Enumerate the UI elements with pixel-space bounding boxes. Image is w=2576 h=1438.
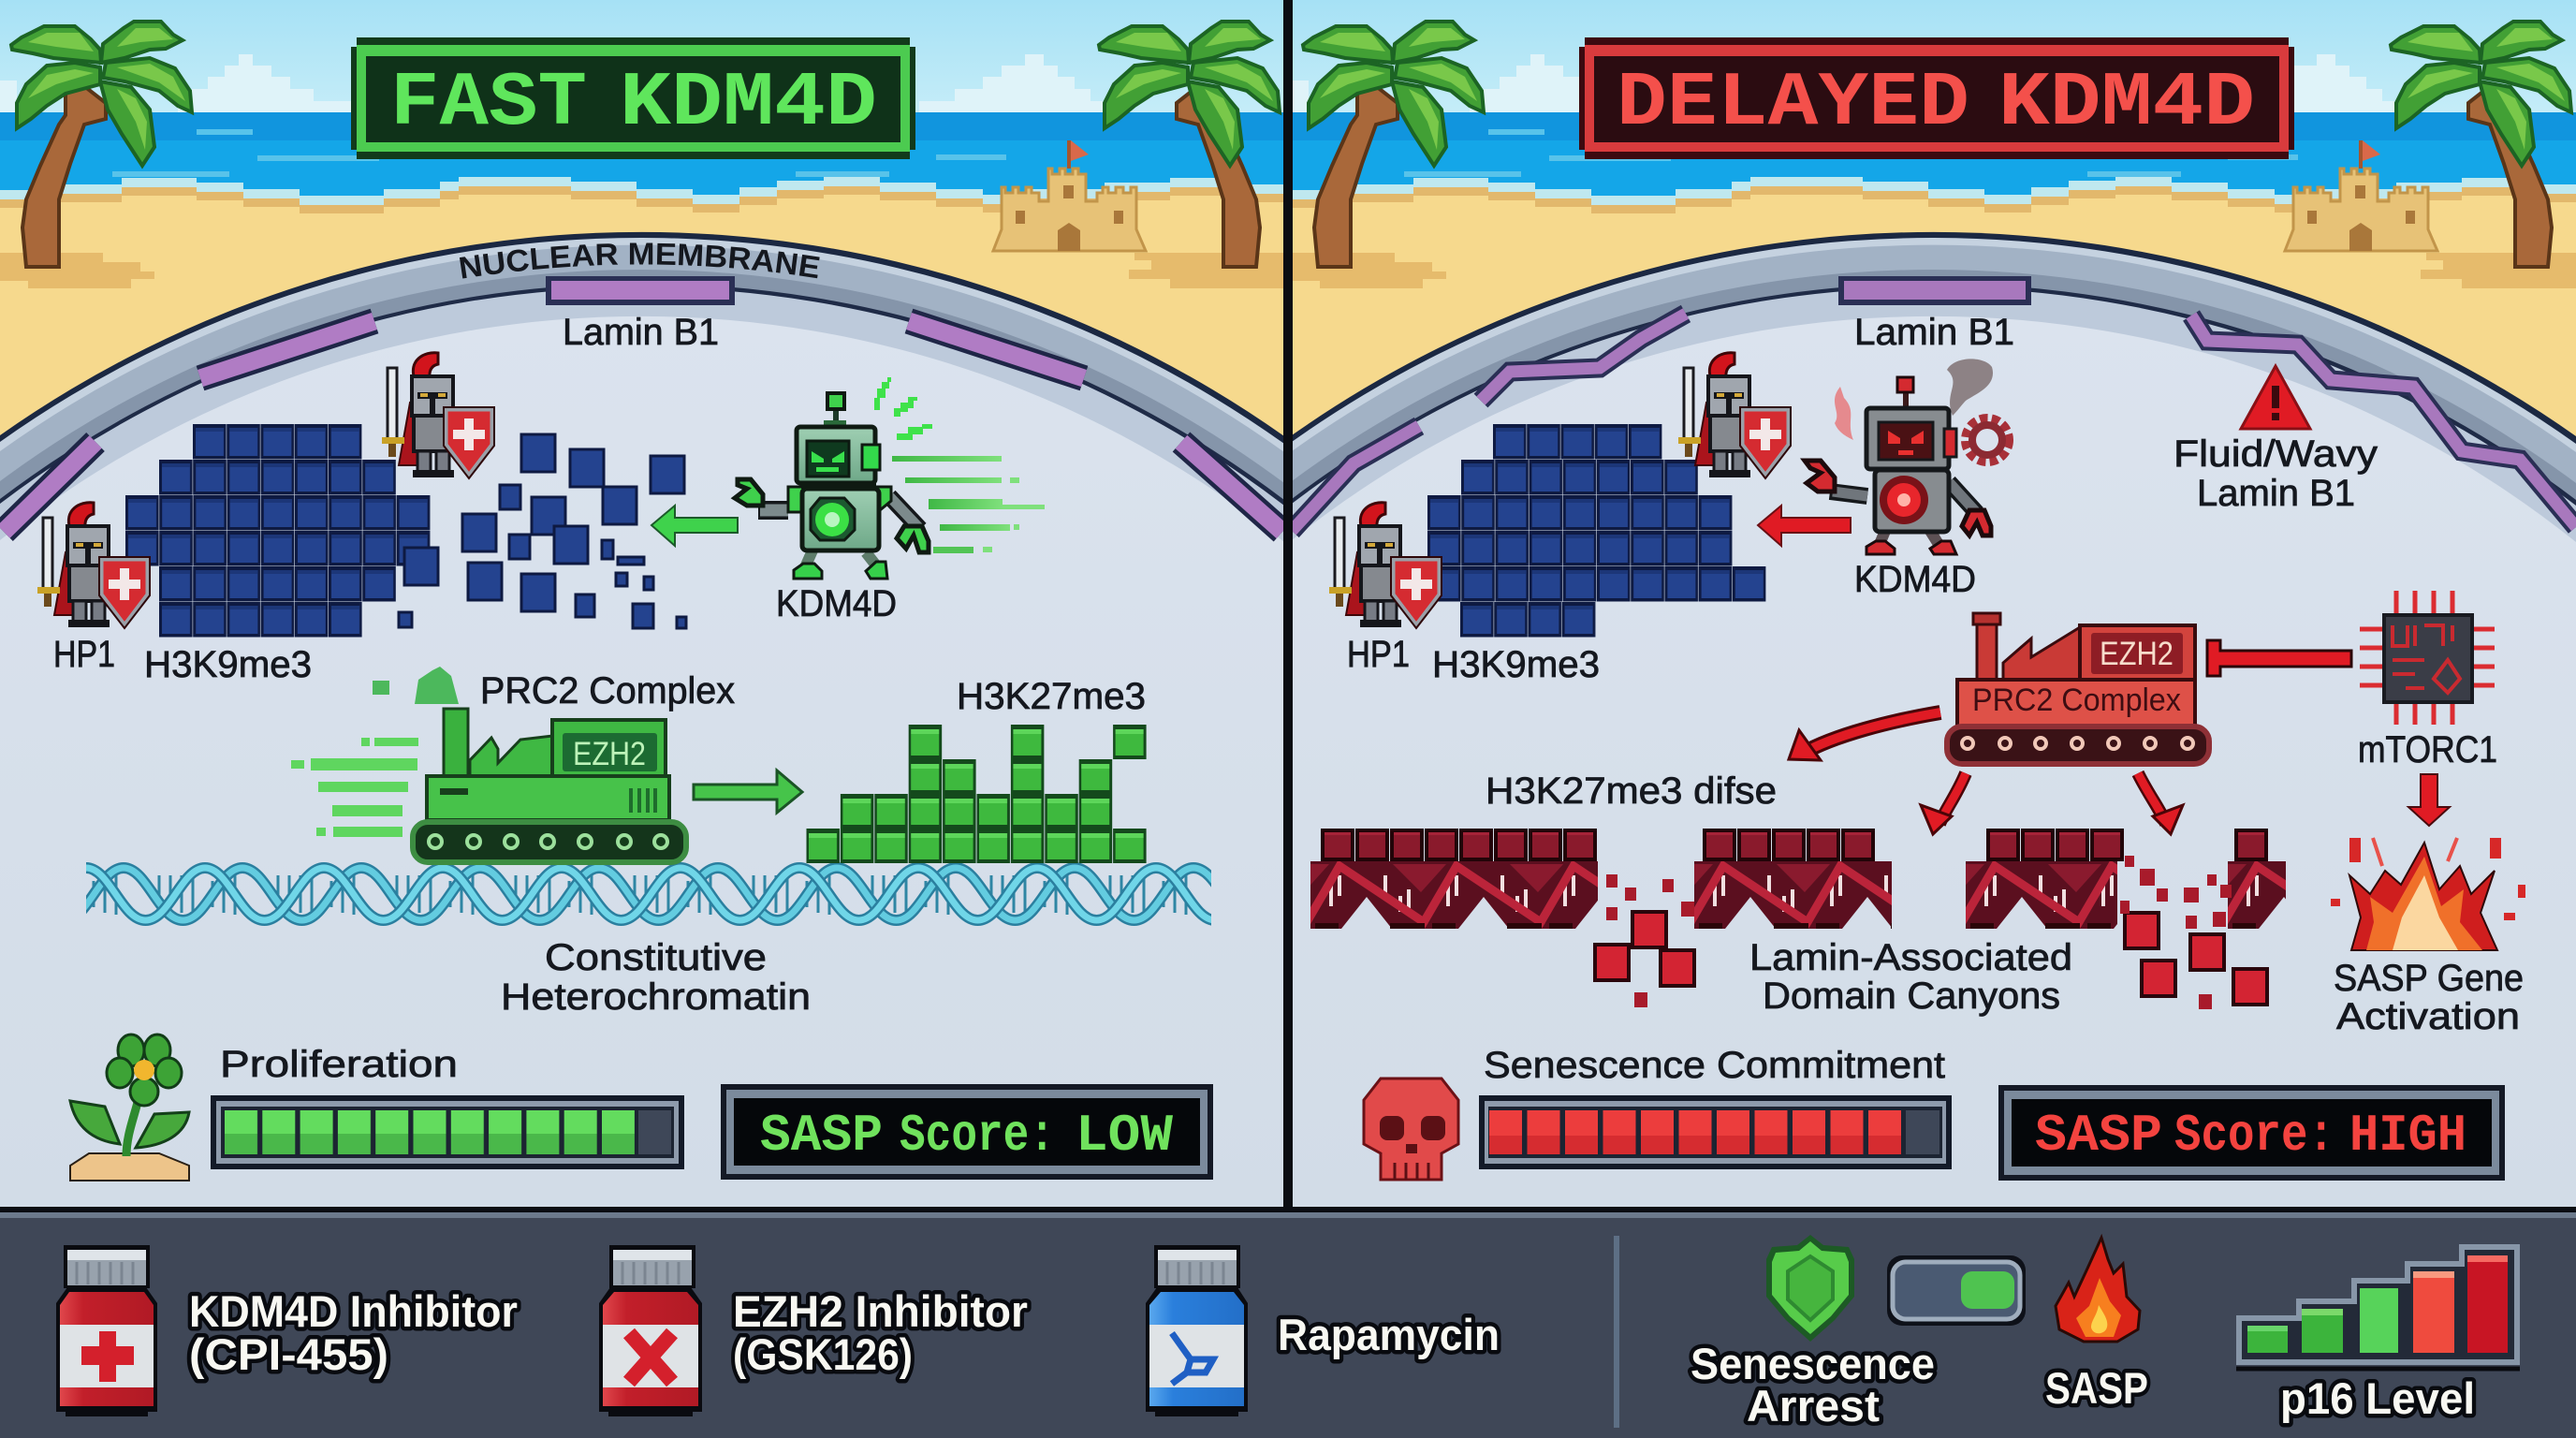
- arrow: KDM4D removes marks: [651, 506, 738, 546]
- label: nuclear membrane: NUCLEAR MEMBRANE: [459, 243, 820, 279]
- label: KDM4D: KDM4D: [1854, 559, 1976, 600]
- icon: explosion: [2331, 838, 2525, 950]
- scattered red H3K27me3 marks: [1595, 856, 2267, 1009]
- arrow: mTORC1 inhibits PRC2: [2207, 640, 2351, 676]
- panel: delayed KDM4D: [1292, 0, 2576, 1221]
- icon: EZH2 inhibitor vial: [599, 1245, 702, 1416]
- icon: knight HP1 upper: [382, 353, 494, 478]
- label: PRC2 Complex: PRC2 Complex: [480, 670, 735, 712]
- beach and nucleus background: [1292, 0, 2576, 1221]
- SASP score: LOW: Score:: [900, 1106, 1055, 1166]
- H3K9me3 heterochromatin block: [1427, 424, 1766, 638]
- icon: green shield: [1766, 1235, 1854, 1342]
- scattered demethylated H3K9 marks: [399, 434, 686, 628]
- icon: PRC2 bulldozer: [291, 667, 686, 862]
- beach and nucleus background: [0, 0, 1284, 1221]
- label: Constitutive Heterochromatin: [504, 942, 809, 1010]
- label: Lamin B1: Lamin B1: [1854, 312, 2014, 353]
- label: EZH2 Inhibitor (GSK126): [733, 1286, 1028, 1379]
- SASP score: LOW: LOW: [1076, 1106, 1173, 1166]
- label: Lamin-Associated Domain Canyons: [1749, 937, 2072, 1017]
- proliferation progress bar: [211, 1095, 684, 1169]
- label: Lamin-Associated Domain Canyons: Lamin-Associated: [1749, 937, 2072, 978]
- red H3K27me3 blocks on collapsed chromatin: [1321, 829, 2269, 861]
- label: mTORC1: mTORC1: [2358, 729, 2497, 770]
- icon: warning triangle: [2241, 366, 2310, 429]
- label: H3K27me3: H3K27me3: [957, 676, 1146, 717]
- SASP score: HIGH: HIGH: [2349, 1106, 2466, 1166]
- label: Lamin B1: Lamin B1: [563, 312, 719, 353]
- icon: flame: [2056, 1238, 2140, 1342]
- label: EZH2: EZH2: [573, 736, 646, 772]
- title: DELAYED KDM4D: KDM4D: [1998, 60, 2255, 147]
- icon: PRC2 bulldozer: [1947, 613, 2209, 764]
- lamin B1 segment and fluid wavy lamin: [1292, 276, 2576, 531]
- icon: sandcastle: [993, 140, 1146, 251]
- icon: sandcastle: [2285, 140, 2437, 251]
- SASP score: LOW: SASP: [760, 1106, 883, 1166]
- label: KDM4D: KDM4D: [776, 583, 897, 624]
- label: H3K27me3 difse: H3K27me3 difse: [1486, 770, 1777, 812]
- label: Senescence Arrest: Arrest: [1747, 1381, 1880, 1431]
- icon: flower: [70, 1034, 189, 1181]
- legend bar: [0, 1207, 2576, 1438]
- label: Fluid/Wavy Lamin B1: Fluid/Wavy: [2174, 433, 2378, 475]
- label: H3K9me3: H3K9me3: [1432, 644, 1600, 685]
- icon: fast KDM4D robot: [735, 377, 1045, 579]
- icon: palm tree right: [1099, 22, 1280, 267]
- label: SASP Gene Activation: [2334, 958, 2524, 1037]
- label: EZH2 Inhibitor (GSK126): EZH2 Inhibitor: [733, 1286, 1028, 1336]
- label: SASP Gene Activation: Activation: [2336, 996, 2520, 1037]
- icon: palm tree left: [11, 22, 192, 267]
- label: EZH2 Inhibitor (GSK126): (GSK126): [733, 1329, 913, 1379]
- label: SASP Gene Activation: SASP Gene: [2334, 958, 2524, 999]
- senescence progress bar: [1479, 1095, 1952, 1169]
- SASP score: HIGH: SASP: [2035, 1106, 2162, 1166]
- panel: fast KDM4D: [0, 0, 1283, 1207]
- label: HP1: HP1: [53, 634, 115, 675]
- SASP score: LOW: [721, 1084, 1213, 1180]
- icon: palm tree left: [1303, 22, 1484, 267]
- legend divider: [1614, 1236, 1619, 1428]
- label: KDM4D Inhibitor (CPI-455): (CPI-455): [189, 1329, 388, 1379]
- icon: delayed KDM4D robot: [1805, 359, 2008, 554]
- lamin B1 segments: [4, 276, 1282, 532]
- label: Senescence Arrest: [1690, 1339, 1935, 1431]
- label: KDM4D Inhibitor (CPI-455): KDM4D Inhibitor: [189, 1286, 518, 1336]
- title: FAST KDM4D: FAST: [390, 60, 587, 147]
- icon: rapamycin vial: [1146, 1245, 1248, 1416]
- icon: knight HP1 upper: [1678, 353, 1791, 478]
- SASP score: HIGH: [1998, 1085, 2505, 1181]
- label: p16 Level: p16 Level: [2280, 1373, 2475, 1423]
- label: SASP: SASP: [2045, 1363, 2148, 1413]
- title: DELAYED KDM4D: DELAYED: [1617, 60, 1969, 147]
- label: Constitutive Heterochromatin: Constitutive: [545, 937, 767, 978]
- label: Rapamycin: Rapamycin: [1278, 1310, 1500, 1359]
- H3K27me3 green block stack: [806, 725, 1147, 863]
- label: Senescence Commitment: Senescence Commitment: [1484, 1045, 1945, 1086]
- title: FAST KDM4D: KDM4D: [620, 60, 877, 147]
- icon: palm tree right: [2391, 22, 2571, 267]
- label: Proliferation: Proliferation: [220, 1044, 458, 1085]
- arrow: mTORC1 to SASP: [2408, 774, 2450, 826]
- p16 level bar chart: [2236, 1247, 2520, 1369]
- H3K9me3 heterochromatin block: [125, 424, 431, 638]
- label: Constitutive Heterochromatin: Heterochromatin: [501, 976, 811, 1018]
- icon: knight HP1 lower: [37, 503, 150, 628]
- DNA strand: [86, 860, 1211, 928]
- arrows: H3K27me3 diffusing from PRC2: [1789, 712, 2183, 834]
- icon: skull: [1364, 1078, 1458, 1180]
- title: DELAYED KDM4D: [1579, 37, 2294, 159]
- center divider: [1283, 0, 1293, 1208]
- arrow: deposits H3K27me3: [694, 770, 802, 813]
- red chromatin canyons: [1310, 861, 2286, 929]
- title: FAST KDM4D: [351, 37, 915, 159]
- label: HP1: HP1: [1347, 634, 1410, 675]
- label: KDM4D Inhibitor (CPI-455): [189, 1286, 518, 1379]
- icon: toggle switch: [1887, 1255, 2026, 1326]
- icon: KDM4D inhibitor vial: [56, 1245, 157, 1416]
- SASP score: HIGH: Score:: [2174, 1106, 2334, 1166]
- icon: mTORC1 chip: [2360, 591, 2495, 725]
- label: EZH2: EZH2: [2100, 636, 2174, 672]
- label: PRC2 Complex: PRC2 Complex: [1972, 682, 2181, 718]
- arrow: slowed KDM4D: [1758, 506, 1851, 546]
- label: Lamin-Associated Domain Canyons: Domain Canyons: [1763, 976, 2060, 1017]
- label: Fluid/Wavy Lamin B1: [2174, 433, 2378, 514]
- icon: knight HP1 lower: [1329, 503, 1442, 628]
- label: Senescence Arrest: Senescence: [1690, 1339, 1935, 1388]
- label: H3K9me3: H3K9me3: [144, 644, 312, 685]
- label: Fluid/Wavy Lamin B1: Lamin B1: [2197, 473, 2355, 514]
